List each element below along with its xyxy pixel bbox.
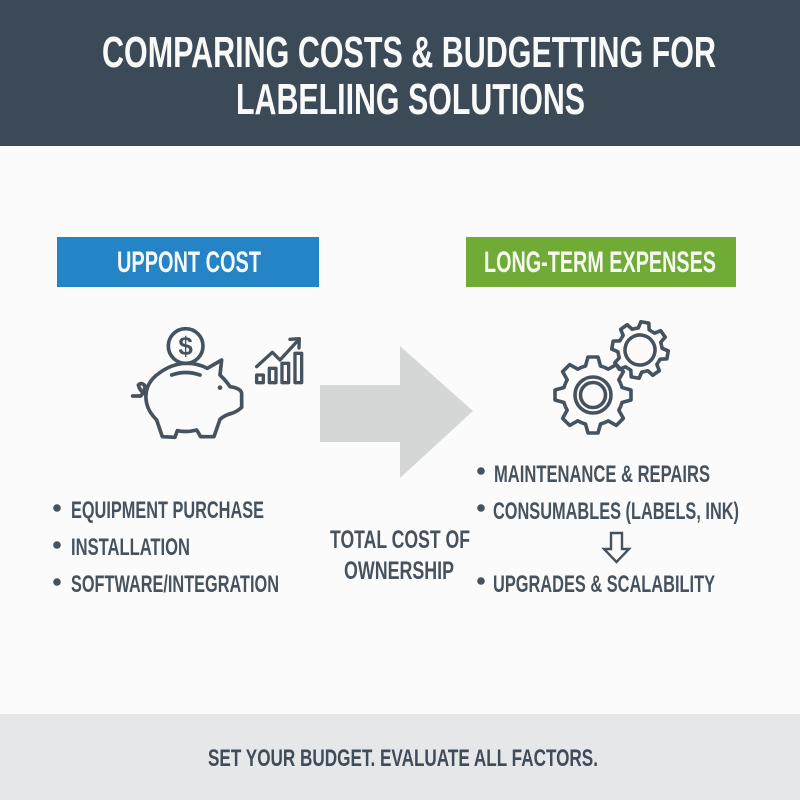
label: total cost of ownership [330, 526, 470, 585]
icon: large gear [555, 357, 631, 433]
icon: piggy bank with coin [133, 329, 242, 437]
footer text: SET YOUR BUDGET. EVALUATE ALL FACTORS. [208, 745, 598, 772]
panel heading: upfront cost: UPPONT COST [117, 246, 261, 279]
list: upfront cost items: EQUIPMENT PURCHASE [71, 497, 264, 524]
header banner [0, 0, 800, 146]
title [102, 28, 716, 124]
list: upfront cost items: SOFTWARE/INTEGRATION [71, 571, 279, 598]
icon: piggy bank with coin: $ [178, 331, 193, 361]
list: upfront cost items [53, 497, 279, 598]
list: long-term expense items [477, 461, 739, 598]
panel heading: upfront cost [57, 237, 319, 287]
icon: growth chart [257, 339, 302, 383]
title: LABELIING SOLUTIONS [236, 75, 585, 124]
footer band [0, 714, 800, 800]
panel heading: long-term expenses [466, 237, 736, 287]
label: total cost of ownership: TOTAL COST OF [330, 526, 470, 554]
list: upfront cost items: INSTALLATION [71, 534, 190, 561]
label: total cost of ownership: OWNERSHIP [344, 557, 454, 585]
icon: small gear [608, 318, 672, 382]
arrow: upfront to long-term [320, 346, 473, 478]
arrow: small down arrow [604, 533, 629, 562]
